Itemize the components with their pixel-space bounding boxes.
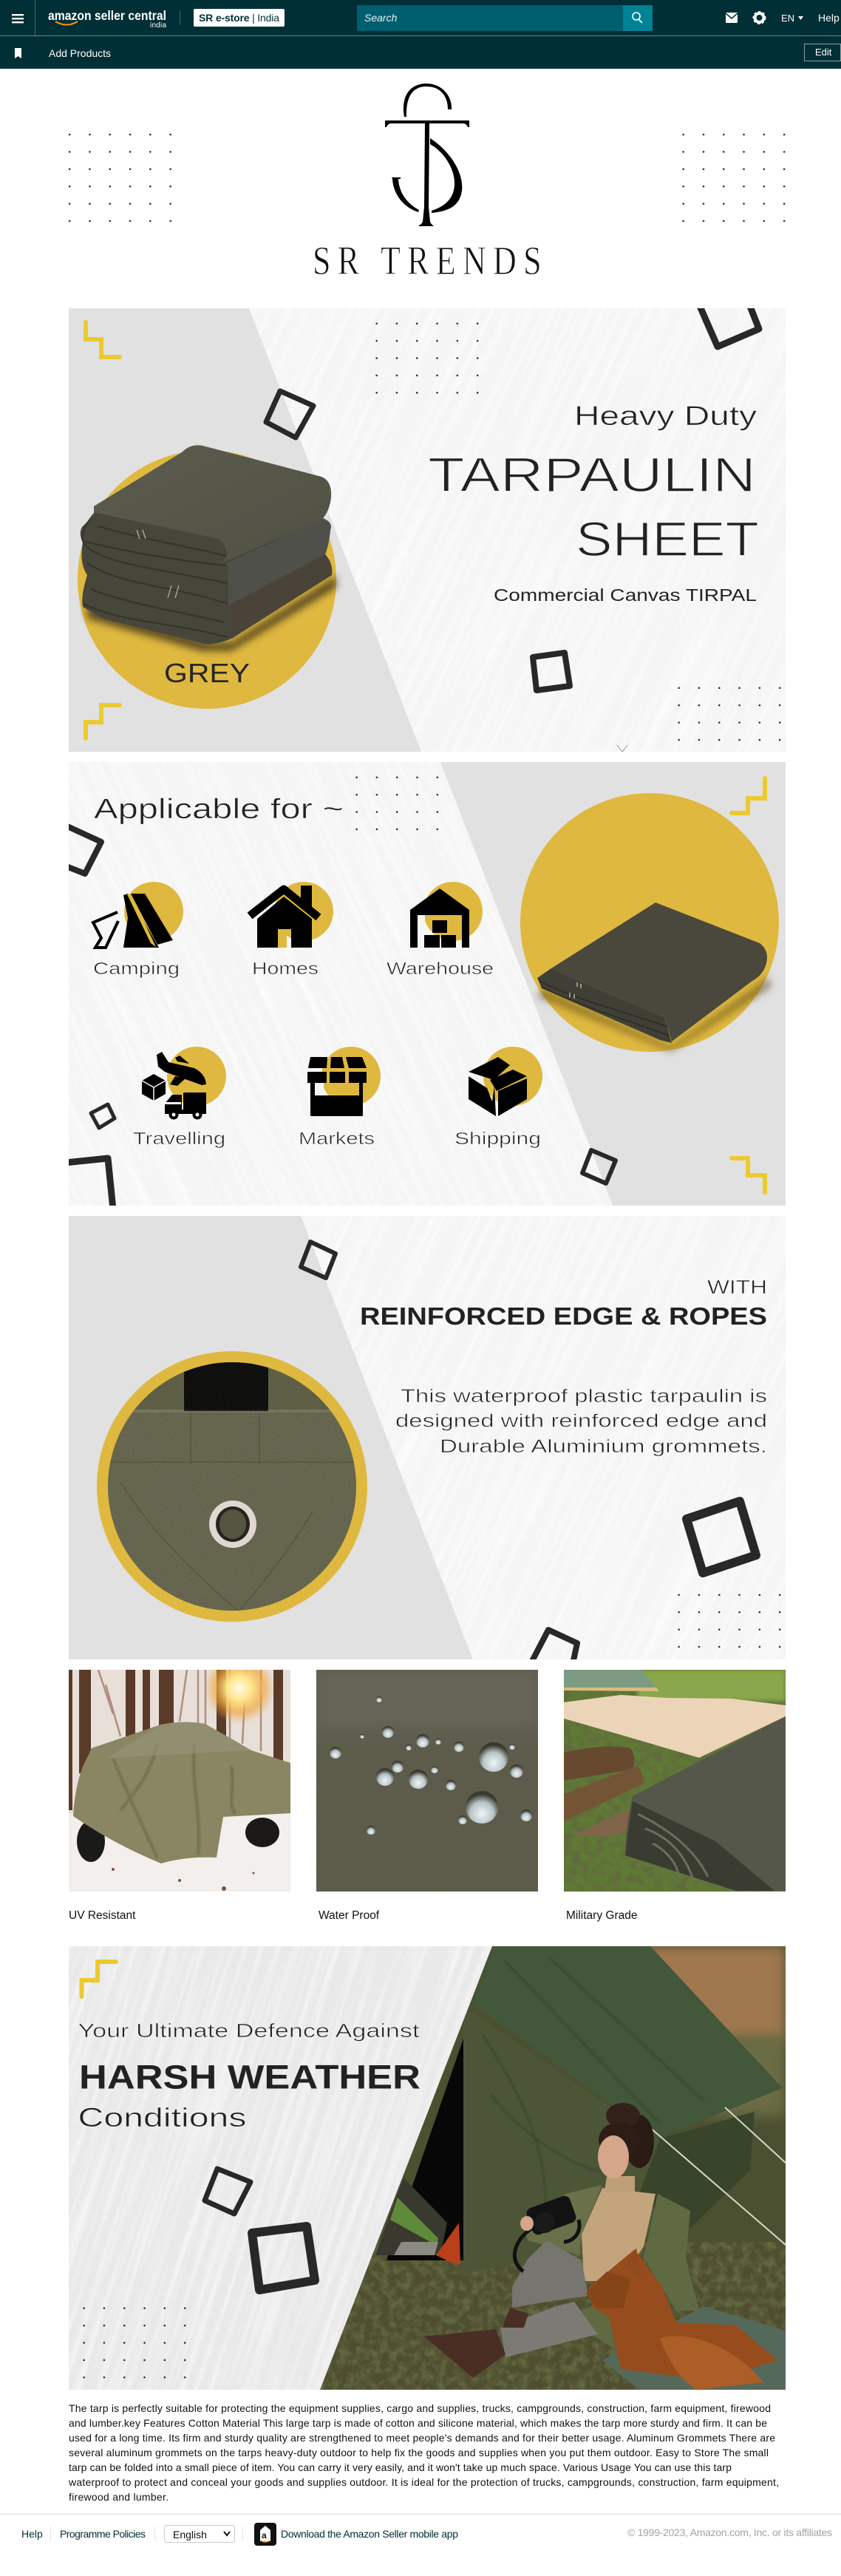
light diagonal panel [69,1946,492,2390]
top navigation bar [0,0,841,69]
text: GREY: GREY [164,658,250,688]
text: Applicable for: Applicable for ~ [94,794,344,825]
photo: UV resistant tarp over vehicle in snowy forest [69,1670,290,1892]
top navigation bar: Add Products [49,47,111,59]
footer bar [0,2513,841,2546]
panel: harsh weather camping scene [69,1946,786,2390]
dog [586,2248,777,2390]
text: body copy: designed with reinforced edge and [395,1410,767,1431]
label: Markets: Markets [299,1129,375,1148]
folded tarp stack photo [81,445,336,651]
panel: applicable for [69,762,786,1206]
top navigation bar: india [150,21,166,30]
icon: Amazon Seller app: a [262,2530,267,2541]
grommet photo in yellow ring [97,1351,367,1622]
top navigation bar: Help [818,12,840,24]
product description text [69,2402,779,2503]
icon: market stall [307,1047,381,1116]
folded tarp photo [537,903,771,1052]
dot grid bottom [669,679,790,749]
text: WITH: WITH [707,1276,767,1298]
dot grid [669,1586,790,1656]
footer bar: Help [21,2528,43,2540]
icon: shipping box [469,1047,542,1116]
text: Commercial Canvas TIRPAL: Commercial Canvas TIRPAL [494,585,757,605]
dot grid [74,2300,195,2386]
product description text: tarp can be folded into a small piece of item. You can carry it very easily, and it won't take up much space. Various Usage You can use this tarp [69,2461,732,2473]
product description text: used for a long time. Its firm and sturdy quality are strengthened to meet people's demands and for their better usage. Aluminum Grommets There are [69,2432,775,2444]
photo background [69,1946,786,2390]
icon: Amazon Seller app [254,2523,276,2546]
language select: English [173,2529,207,2541]
top navigation bar: EN [781,13,794,24]
icon: warehouse [410,882,483,948]
dot grid [347,769,448,838]
footer bar: Download the Amazon Seller mobile app [281,2528,458,2540]
text: TARPAULIN: TARPAULIN [428,447,756,502]
text: Conditions: Conditions [78,2102,247,2132]
caption: UV Resistant: UV Resistant [69,1909,135,1922]
yellow zigzag top [86,322,120,357]
panel: reinforced edge and ropes [69,1216,786,1659]
brand logo: SR Trends [68,84,786,283]
woman with camera [424,2103,699,2378]
top navigation bar: Edit [815,47,832,58]
monogram [385,84,469,226]
dark frame shapes [205,2169,315,2290]
icon: home [250,882,333,948]
text: SHEET: SHEET [576,512,759,566]
panel: heavy duty tarpaulin hero [69,308,786,752]
yellow zigzag [81,1962,116,1996]
yellow circle [520,793,779,1052]
product description text: The tarp is perfectly suitable for protecting the equipment supplies, cargo and supplies, trucks, campgrounds, construction, farm equipment, firewood [69,2402,771,2414]
top navigation bar: Search [364,12,398,24]
caption: Water Proof: Water Proof [319,1909,379,1922]
dot grid right [673,126,794,230]
yellow zigzags [732,778,765,1192]
text: body copy [395,1386,767,1457]
photo: military grade rolled tarp on grass [564,1670,786,1892]
dark frame shapes [266,305,759,690]
photo: water proof droplets on canvas [316,1670,538,1892]
icon: travelling plane, box and truck [142,1047,226,1119]
text: Your Ultimate Defence Against: Your Ultimate Defence Against [78,2019,421,2042]
product description text: waterproof to protect and conceal your goods and supplies outdoor. It is ideal for the protection of trucks, campgrounds, construction, farm equipment, [69,2476,779,2488]
language select [164,2525,235,2543]
caption: Military Grade: Military Grade [566,1909,637,1922]
text: body copy: Durable Aluminium grommets. [440,1436,767,1457]
top navigation bar: amazon seller central [48,8,166,23]
label: Warehouse: Warehouse [387,959,494,978]
top navigation bar: SR e-store | India [199,12,279,24]
footer bar: Programme Policies [60,2528,146,2540]
dark frame shapes [64,825,616,1209]
dot grid left [59,126,180,230]
label: Camping: Camping [93,959,180,978]
text: Heavy Duty: Heavy Duty [574,401,757,431]
brand name: SR TRENDS [313,238,542,283]
text: body copy: This waterproof plastic tarpaulin is [401,1386,767,1407]
product description text: firewood and lumber. [69,2491,168,2503]
text: REINFORCED EDGE & ROPES: REINFORCED EDGE & ROPES [360,1302,767,1330]
dark frame shapes [301,1242,756,1664]
yellow circle [78,450,336,709]
text: HARSH WEATHER: HARSH WEATHER [79,2058,421,2096]
product description text: and lumber.key Features Cotton Material This large tarp is made of cotton and silicone material, which makes the tarp more sturdy and firm. It can be [69,2417,767,2429]
yellow zigzag bottom [86,705,120,738]
label: Shipping: Shipping [454,1129,541,1148]
product description text: several aluminum grommets on the tarps heavy-duty outdoor to help fix the goods and supplies when you put them outdoor. Easy to Store The small [69,2447,769,2458]
dot grid top [367,315,488,401]
label: Homes: Homes [252,959,319,978]
footer bar: © 1999-2023, Amazon.com, Inc. or its affiliates [627,2526,832,2538]
icon: camping tent [93,882,183,948]
label: Travelling: Travelling [133,1129,225,1148]
